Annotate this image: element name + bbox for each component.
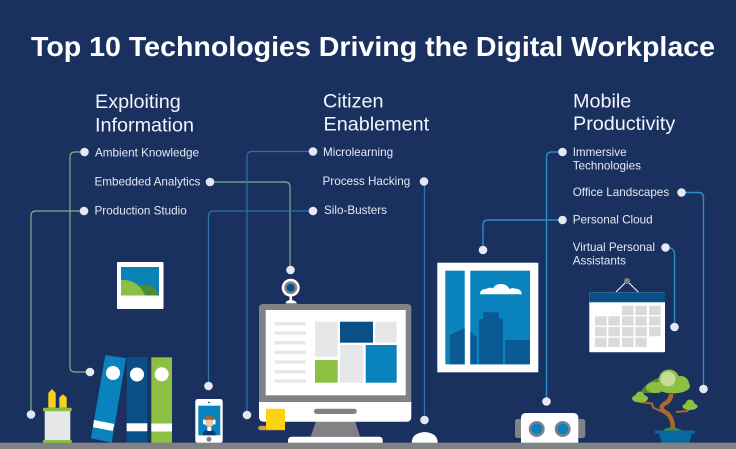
city buildings: [450, 312, 530, 364]
calendar day grid: [595, 306, 660, 347]
connector: Virtual Personal Assistants to calendar: [661, 243, 679, 331]
connector: Microlearning to sticky note: [243, 147, 317, 419]
column: Citizen Enablement: [322, 90, 430, 217]
connector: Process Hacking to mouse: [420, 177, 429, 424]
icon: mouse: [412, 432, 438, 443]
icon: webcam: [282, 279, 300, 304]
item: Virtual Personal Assistants: Assistants: [573, 254, 626, 267]
icon: bonsai tree: [632, 370, 698, 443]
item: Silo-Busters: Silo-Busters: [324, 204, 387, 217]
icon: smartphone: [195, 399, 223, 443]
connector: Office Landscapes to bonsai: [677, 188, 708, 393]
item: Personal Cloud: Personal Cloud: [573, 214, 653, 226]
connector: Immersive Technologies to robot: [542, 148, 567, 406]
title: Top 10 Technologies Driving the Digital Workplace: [31, 31, 715, 62]
bonsai trunk: [662, 394, 673, 430]
heading: Mobile Productivity: Mobile: [573, 90, 631, 112]
icon: picture frame: [117, 262, 164, 309]
connector: Production Studio to pencil cup: [27, 207, 88, 419]
connector: Embedded Analytics to webcam: [206, 178, 295, 274]
column: Exploiting Information: [94, 91, 201, 218]
heading: Citizen Enablement: Enablement: [324, 114, 430, 136]
item: Embedded Analytics: Embedded Analytics: [94, 176, 201, 188]
bonsai pot: [655, 430, 695, 443]
item: Ambient Knowledge: Ambient Knowledge: [95, 147, 199, 160]
connector: Silo-Busters to phone: [204, 207, 317, 390]
item: Immersive Technologies: Technologies: [573, 160, 641, 173]
floor: [0, 443, 736, 449]
heading: Exploiting Information: Information: [95, 114, 194, 136]
icon: pencil cup: [43, 389, 72, 443]
icon: window with city view: [437, 263, 538, 372]
item: Immersive Technologies: Immersive: [573, 146, 627, 159]
cloud: [480, 284, 522, 294]
heading: Exploiting Information: Exploiting: [95, 91, 181, 113]
item: Office Landscapes: Office Landscapes: [573, 186, 669, 199]
item: Microlearning: Microlearning: [323, 146, 393, 159]
screen: text lines: [275, 322, 306, 383]
heading: Citizen Enablement: Citizen: [323, 90, 383, 112]
icon: desktop monitor: [259, 304, 411, 443]
item: Production Studio: Production Studio: [94, 204, 187, 218]
icon: wall calendar: [589, 278, 665, 352]
connector: Personal Cloud to window: [479, 216, 567, 254]
item: Virtual Personal Assistants: Virtual Personal: [573, 241, 655, 254]
connector: Ambient Knowledge to books: [70, 148, 94, 376]
bonsai foliage main: [632, 370, 698, 410]
icon: robot: [515, 413, 585, 443]
column: Mobile Productivity: [573, 90, 675, 267]
icon: binders: [91, 355, 172, 443]
icon: sticky note: [258, 409, 285, 430]
bonsai foliage back: [640, 378, 668, 393]
heading: Mobile Productivity: Productivity: [573, 113, 675, 135]
screen: tiles: [315, 322, 397, 383]
item: Process Hacking: Process Hacking: [322, 175, 410, 188]
